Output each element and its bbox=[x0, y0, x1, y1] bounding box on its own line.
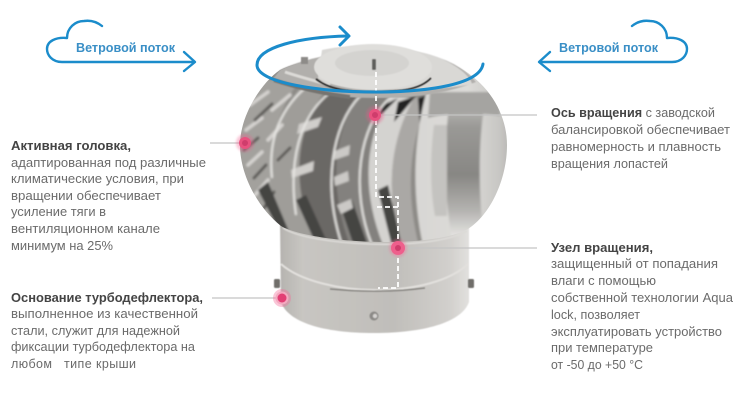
hotspot: base bbox=[273, 289, 291, 307]
right wind label bbox=[539, 21, 687, 71]
dark lower creases bbox=[258, 182, 402, 246]
text: rotation node: собственной технологии Aqua bbox=[551, 291, 733, 305]
text: active head: климатические условия, при bbox=[11, 172, 184, 186]
text: rotation axis: равномерность и плавность bbox=[551, 140, 721, 154]
text: active head: минимум на 25% bbox=[11, 239, 113, 253]
leader lines bbox=[210, 115, 537, 298]
text: active head: вентиляционном канале bbox=[11, 222, 160, 236]
text: active head: Активная головка, bbox=[11, 139, 131, 153]
text: deflector base: Основание турбодефлектора, bbox=[11, 291, 203, 305]
hotspot: rotation node bbox=[389, 239, 407, 257]
top cap bbox=[301, 44, 432, 92]
turbine deflector bbox=[235, 44, 520, 333]
left blades bbox=[240, 80, 294, 220]
text: active head bbox=[11, 139, 206, 253]
blade highlights bbox=[271, 88, 392, 245]
text: rotation node: защищенный от попадания bbox=[551, 257, 718, 271]
text: rotation node: эксплуатировать устройство bbox=[551, 325, 722, 339]
text: rotation node: Узел вращения, bbox=[551, 241, 653, 255]
text: deflector base: стали, служит для надежной bbox=[11, 324, 180, 338]
hotspot: rotation axis bbox=[366, 106, 384, 124]
rotation arrow bbox=[257, 27, 483, 92]
text: rotation axis: Ось вращения с заводской bbox=[551, 106, 715, 120]
text: deflector base bbox=[11, 291, 203, 371]
text: active head: вращении обеспечивает bbox=[11, 189, 161, 203]
text: rotation node: lock, позволяет bbox=[551, 308, 640, 322]
mottled silver reflections on left blades bbox=[244, 92, 290, 208]
hotspot: active head bbox=[236, 134, 254, 152]
top ribs bbox=[272, 46, 476, 98]
left wind label bbox=[47, 21, 195, 71]
text: deflector base: фиксации турбодефлектора на bbox=[11, 340, 195, 354]
right wind cloud arrow bbox=[539, 21, 687, 71]
right wind text: Ветровой поток bbox=[559, 41, 659, 55]
text: rotation node: влаги с помощью bbox=[551, 274, 656, 288]
blade window highlights bbox=[291, 117, 322, 178]
text: rotation node bbox=[551, 241, 733, 372]
text: active head: адаптированная под различные bbox=[11, 156, 206, 170]
rotation axis dashed line bbox=[376, 72, 398, 288]
text: rotation node: при температуре bbox=[551, 341, 653, 355]
turbine base bbox=[280, 222, 469, 333]
text: deflector base: любом типе крыши bbox=[11, 357, 136, 371]
text: rotation axis: балансировкой обеспечивает bbox=[551, 123, 730, 137]
text: deflector base: выполненное из качественной bbox=[11, 307, 198, 321]
text: active head: усиление тяги в bbox=[11, 205, 106, 219]
left wind cloud arrow bbox=[47, 21, 195, 71]
left wind text: Ветровой поток bbox=[76, 41, 176, 55]
text: rotation axis: вращения лопастей bbox=[551, 157, 668, 171]
rotating head bbox=[240, 63, 507, 242]
text: rotation node: от -50 до +50 °C bbox=[551, 358, 643, 372]
black slits under the cap bbox=[380, 95, 426, 122]
base bolts bbox=[274, 279, 474, 320]
text: rotation axis bbox=[551, 106, 730, 171]
smooth right dome bbox=[414, 66, 507, 240]
